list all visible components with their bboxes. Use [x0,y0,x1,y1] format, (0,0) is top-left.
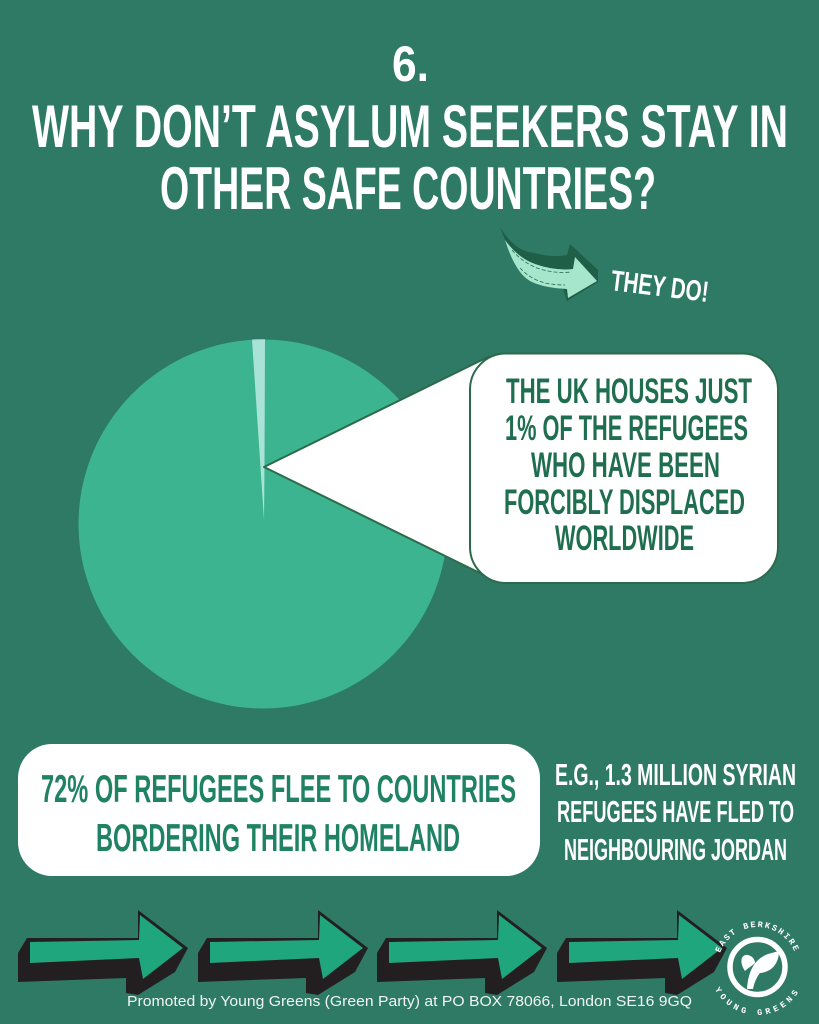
arrow 1 [18,910,188,995]
arrow 3 [377,910,547,995]
logo: East Berkshire Young Greens: YOUNG GREENS [716,986,798,1015]
panel: 72% of refugees: 72% OF REFUGEES FLEE TO COUNTRIES [41,768,516,811]
panel: 72% of refugees [18,744,540,876]
footer: promoted by: Promoted by Young Greens (Green Party) at PO BOX 78066, London SE16 9GQ [127,993,692,1010]
logo: East Berkshire Young Greens: EAST BERKSHIRE [715,921,800,952]
callout: UK houses 1%: WORLDWIDE [555,519,694,558]
callout: UK houses 1% [264,354,778,583]
they do label: THEY DO! [609,265,710,309]
panel: 72% of refugees: BORDERING THEIR HOMELAND [96,817,460,860]
logo: East Berkshire Young Greens [715,921,800,1015]
title [32,36,788,222]
text: Syria example [555,757,796,867]
arrow 2 [198,910,368,995]
arrow 4 [557,910,727,995]
callout: UK houses 1%: WHO HAVE BEEN [531,446,720,485]
pie chart [78,339,448,708]
icon: curved arrow [500,227,598,301]
title: 6. [392,36,429,92]
